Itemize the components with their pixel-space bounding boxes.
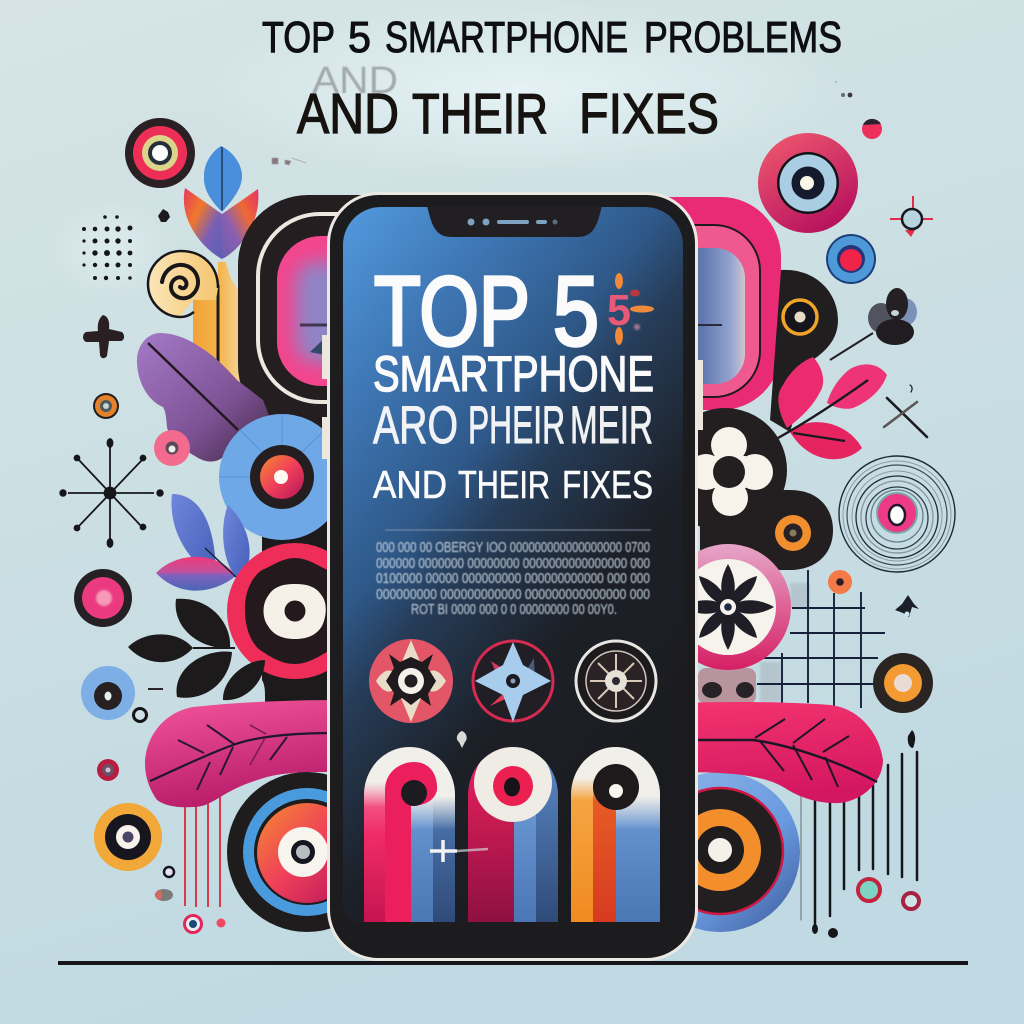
title line two (297, 82, 719, 146)
title line two: FIXES (579, 82, 719, 146)
dark blob lower (700, 490, 833, 570)
target: pink large (758, 133, 858, 233)
dark flower (830, 288, 917, 360)
vertical lines (801, 752, 917, 925)
small spade icon (457, 731, 467, 748)
orange ring (775, 515, 811, 551)
arch: dark outer with pink window (238, 195, 362, 428)
heading top five: 5 (553, 256, 599, 366)
target: pink (74, 569, 132, 627)
concentric ring spiral (839, 456, 955, 572)
screen body text (376, 530, 651, 618)
side buttons (322, 335, 703, 459)
heading garbled line: MEIR (570, 396, 653, 455)
pink dot with eye (154, 430, 190, 466)
heading and their fixes: THEIR (458, 464, 550, 507)
x mark (884, 385, 927, 437)
blue blob with eye (81, 666, 135, 720)
big pink leaf left (145, 700, 345, 807)
heading top five: TOP (374, 256, 530, 366)
screen heading (373, 256, 654, 507)
small red target (97, 759, 119, 781)
heading garbled line: ARO (373, 396, 458, 455)
leaf: blue (204, 146, 242, 212)
big target right (640, 772, 800, 932)
dot grid (82, 215, 132, 280)
target: blue (826, 234, 876, 284)
small rings (858, 879, 919, 909)
column one (364, 745, 455, 923)
title line one: SMARTPHONE (385, 13, 628, 62)
golden bar divider (216, 285, 220, 362)
starburst (60, 439, 163, 547)
crosshair (890, 196, 933, 237)
dark fill behind wheels (262, 500, 345, 715)
heading garbled line: PHEIR (468, 396, 565, 455)
heading garbled line (373, 396, 653, 455)
red lines (185, 795, 220, 907)
leaf: purple (137, 333, 290, 470)
golden bar behind spiral (193, 262, 243, 388)
screen body text: 000 000 00 OBERGY IOO 000000000000000000 0700 (376, 539, 650, 556)
target: orange (94, 803, 162, 871)
grid shadow patch (760, 583, 810, 702)
title line two: THEIR (412, 82, 548, 146)
small ring (134, 708, 146, 722)
target: dark orange (873, 653, 933, 713)
title line one: PROBLEMS (644, 13, 842, 62)
black leaves (128, 599, 265, 700)
leaf: orange purple right (222, 189, 258, 259)
line end marks (812, 730, 915, 938)
flower wheel (665, 544, 791, 670)
heading smartphone: SMARTPHONE (373, 346, 654, 402)
dash mark (148, 688, 163, 690)
big target left (227, 772, 387, 932)
heading and their fixes (373, 464, 653, 507)
phone (322, 194, 703, 960)
title line one: TOP (262, 13, 335, 62)
bottom baseline (58, 961, 968, 965)
heading and their fixes: FIXES (562, 464, 653, 507)
big pink leaf right (680, 702, 883, 803)
column three (571, 745, 660, 923)
right decorations (600, 119, 955, 938)
blue wheel (219, 414, 345, 540)
title (262, 13, 842, 146)
icon: blue star (473, 641, 553, 722)
heading and their fixes: AND (373, 464, 447, 507)
small five burst: 5 (607, 286, 631, 335)
line grid (757, 570, 885, 708)
leaf: orange purple left (184, 188, 222, 259)
phone screen (343, 207, 683, 922)
screen body text: 0100000 00000 000000000 000000000000 000 000 (376, 570, 650, 587)
spiral (148, 251, 218, 317)
small insect mark (895, 595, 919, 617)
left decorations (59, 118, 362, 934)
notch (427, 206, 602, 237)
title line one: 5 (348, 13, 371, 62)
red scalloped target (227, 543, 363, 679)
screen body text: 000000000 000000000000 000000000000000 000 (376, 586, 650, 603)
title line two: AND (297, 82, 399, 146)
plus mark on columns (430, 840, 488, 862)
icon: red gear (369, 639, 453, 723)
screen body text: ROT BI 0000 000 0 0 00000000 00 00Y0. (411, 601, 617, 618)
screen body text: 000000 0000000 00000000 0000000000000000 000 (376, 555, 650, 572)
ghost word: AND (312, 60, 398, 102)
blue leaves cluster (156, 494, 250, 591)
phone shell (328, 194, 696, 960)
black blob with orange ring (770, 270, 838, 432)
plus mark (83, 315, 124, 358)
dark disc with white flower (663, 408, 787, 532)
tiny targets (155, 867, 226, 932)
target: top left (125, 118, 195, 188)
icon: wheel (576, 641, 656, 721)
target: small orange (93, 393, 119, 419)
orange dot (828, 570, 852, 594)
smudge marks near title (272, 81, 852, 165)
column two (468, 744, 558, 923)
dark eye patch (698, 668, 756, 704)
small blot (158, 209, 170, 222)
small red dot (862, 119, 882, 139)
small five burst (607, 273, 654, 345)
pink leaves sprig (778, 357, 887, 459)
title line one (262, 13, 842, 62)
pink arch (600, 197, 781, 410)
